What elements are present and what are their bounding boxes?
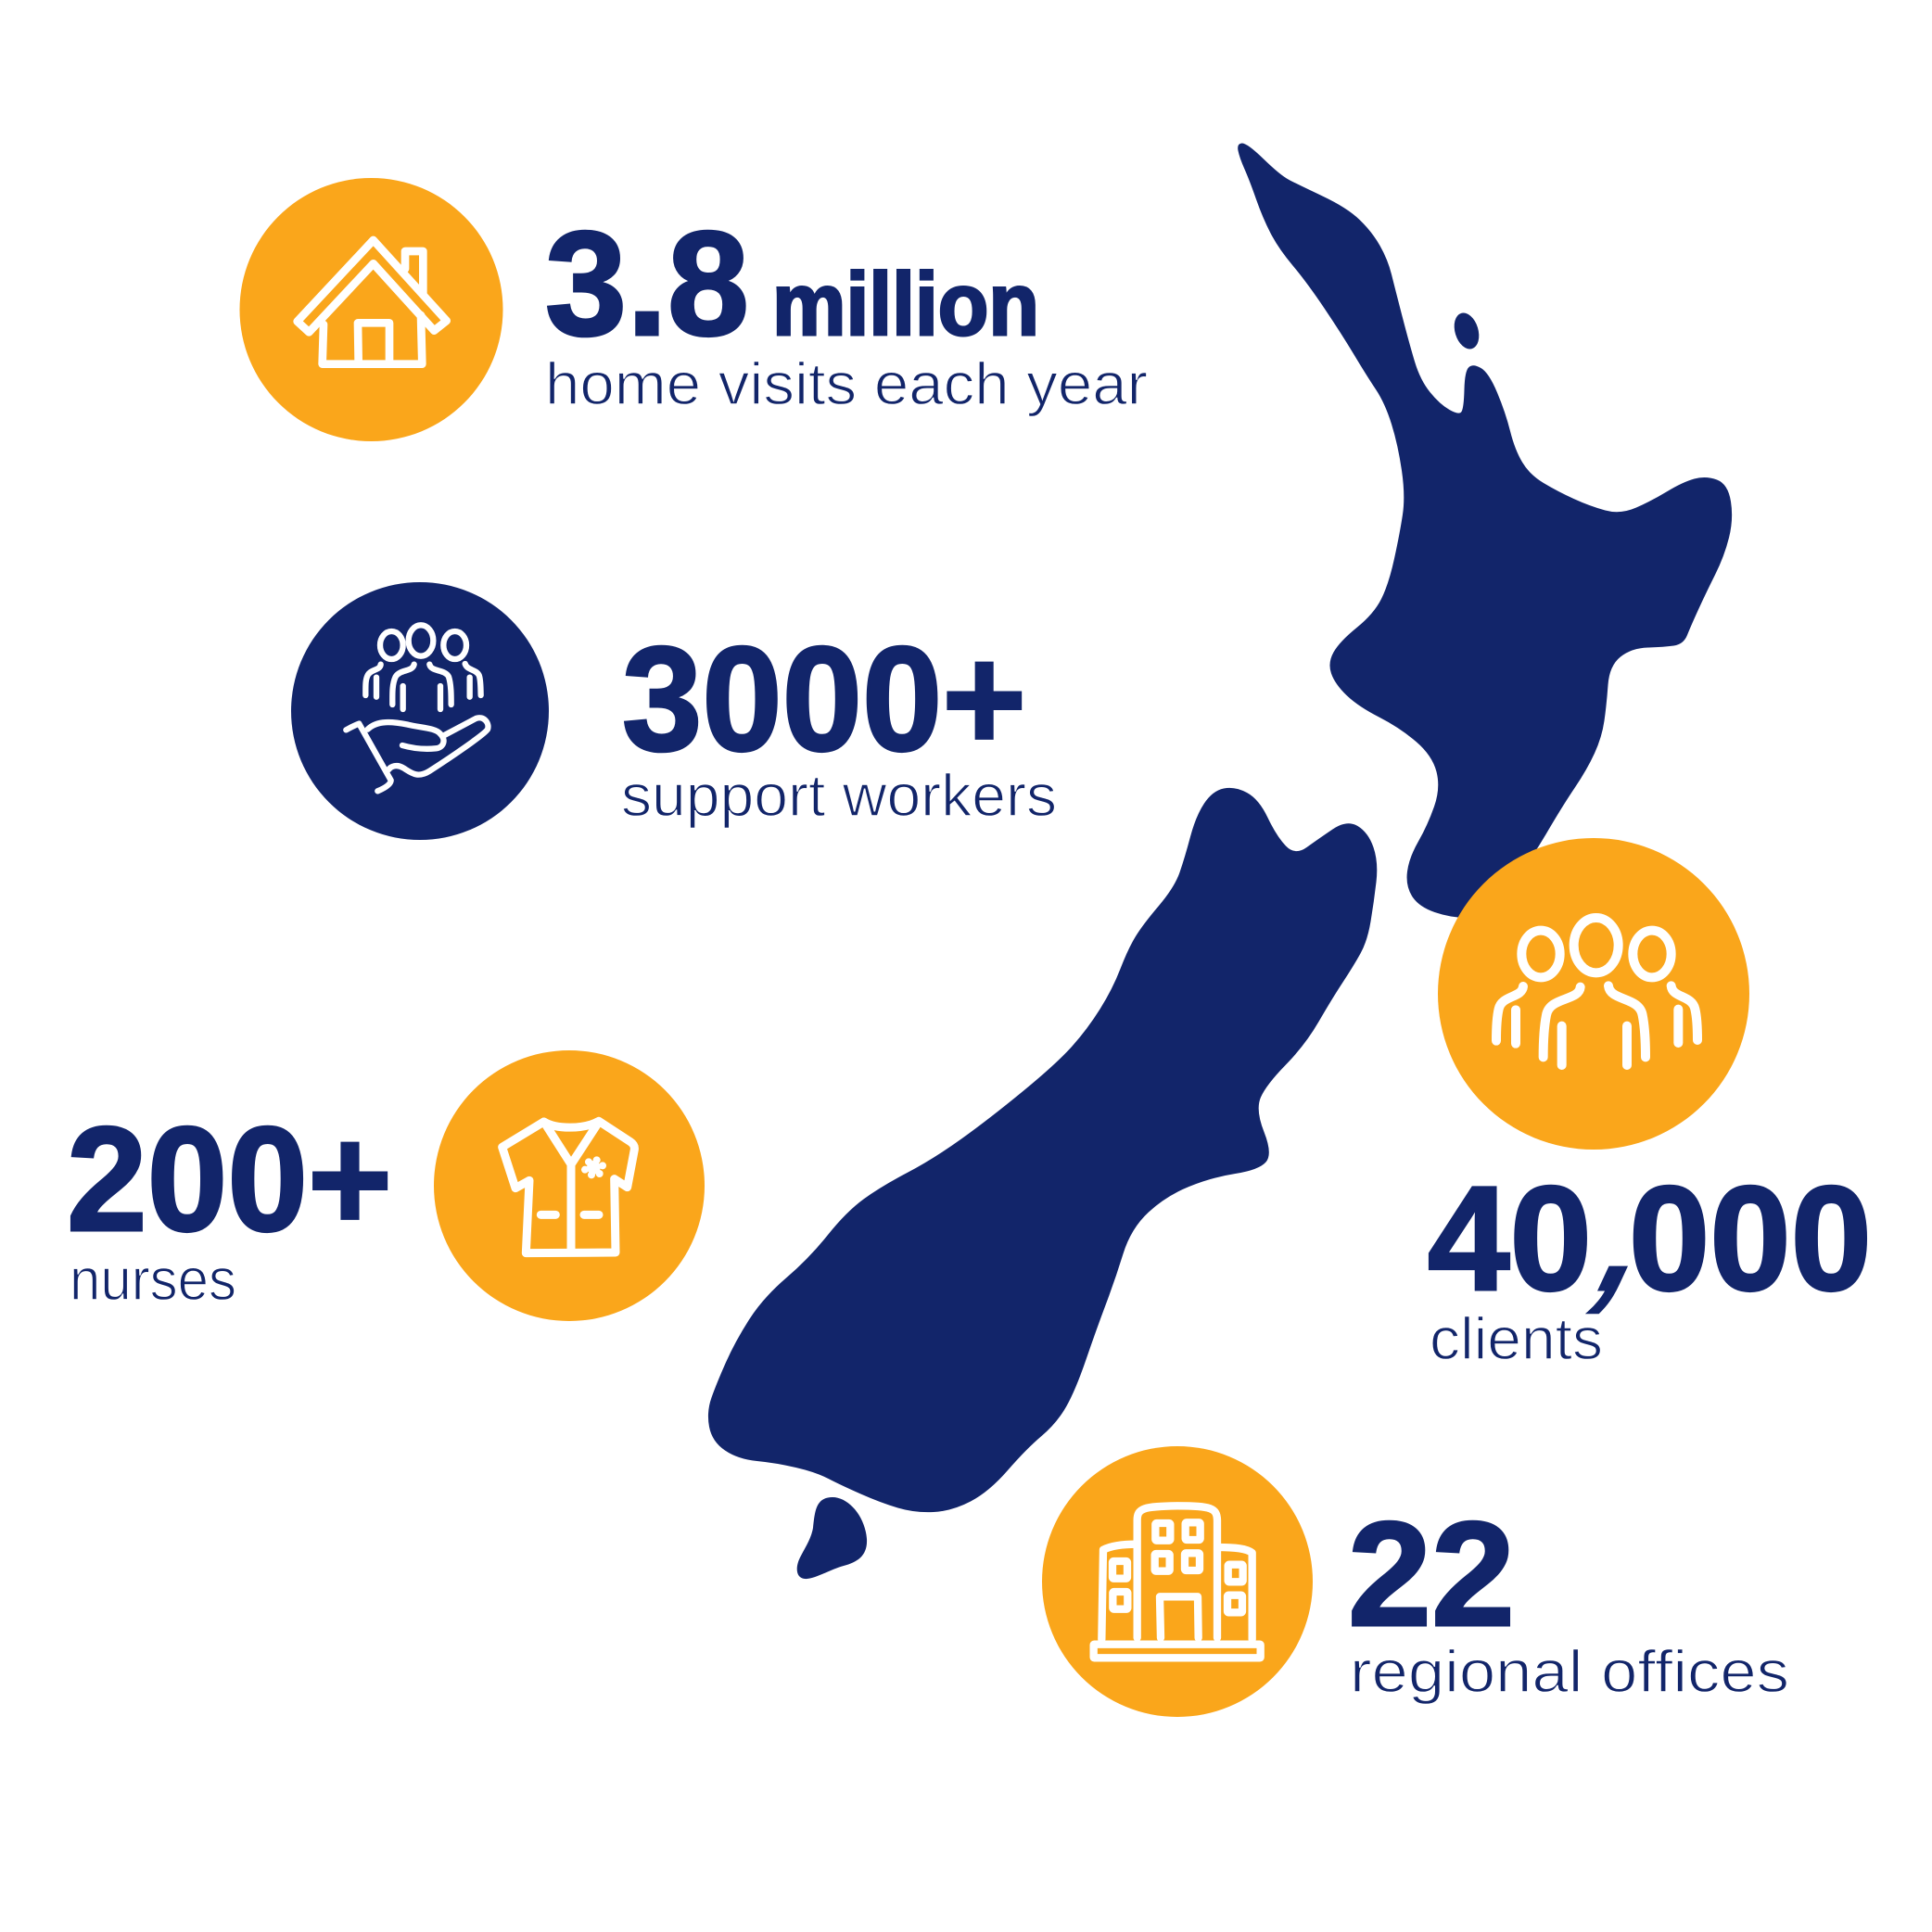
- figure: 3000+: 3000+: [622, 616, 1026, 782]
- stat: support workers: [291, 582, 1057, 840]
- label: clients: clients: [1430, 1305, 1603, 1372]
- figure: 40,000: [1428, 1155, 1872, 1321]
- label: home visits each year: home visits each year: [545, 350, 1148, 417]
- icon: three people in orange circle: [1438, 838, 1749, 1150]
- stat: nurses: [67, 1050, 705, 1321]
- map: Great Barrier Island: [1450, 310, 1483, 352]
- figure: 3.8 million: 3.8: [545, 200, 749, 366]
- stat: regional offices: [1042, 1446, 1789, 1717]
- figure: 200+: 200+: [67, 1096, 392, 1262]
- map: North Island: [1238, 143, 1732, 918]
- stat: home visits: [239, 178, 1148, 441]
- label: regional offices: regional offices: [1350, 1638, 1789, 1705]
- figure: 22: 22: [1348, 1491, 1515, 1657]
- map: South Island: [708, 788, 1377, 1512]
- figure: 40,000: ,: [1576, 1155, 1686, 1321]
- stat: clients: [1428, 838, 1872, 1372]
- icon: house in orange circle: [239, 178, 502, 441]
- map of New Zealand: [708, 143, 1732, 1579]
- icon: office building in orange circle: [1042, 1446, 1313, 1717]
- figure: 40,000: 40: [1428, 1155, 1592, 1321]
- map: Stewart Island: [797, 1497, 867, 1579]
- icon: people in a hand in navy circle: [291, 582, 549, 840]
- label: nurses: nurses: [70, 1246, 236, 1313]
- stat: home visits: million: [772, 255, 1039, 354]
- figure: 40,000: 000: [1629, 1155, 1872, 1321]
- icon: nurse uniform in orange circle: [434, 1050, 705, 1321]
- label: support workers: support workers: [621, 762, 1057, 829]
